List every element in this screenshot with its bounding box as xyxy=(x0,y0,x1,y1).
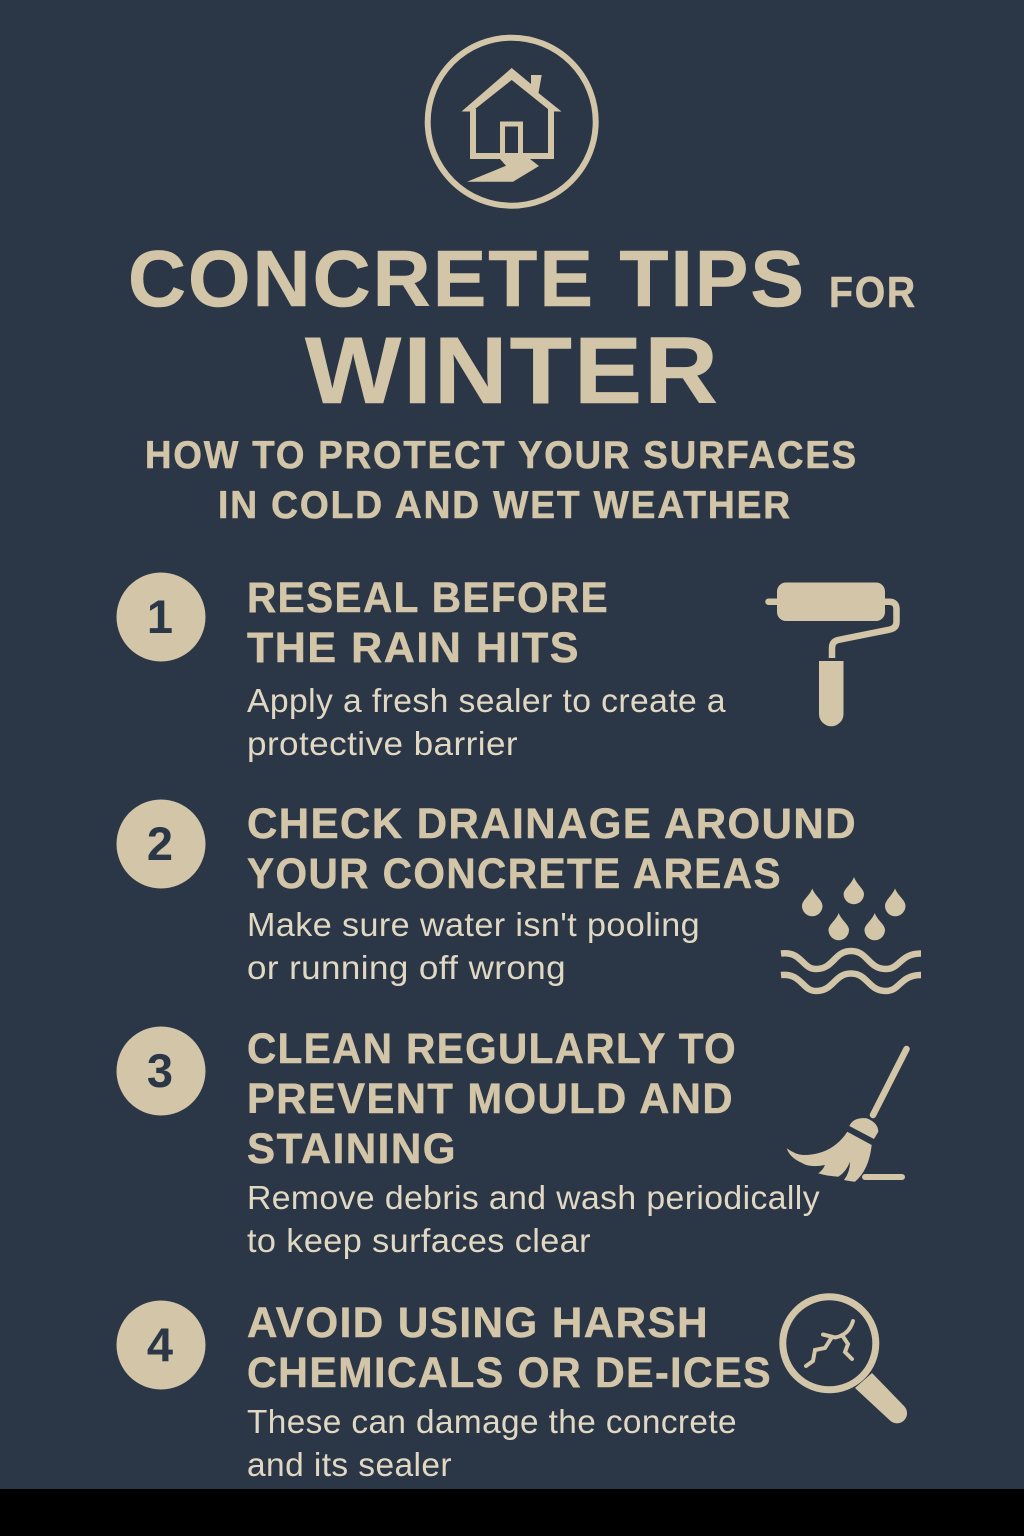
subtitle: HOW TO PROTECT YOUR SURFACES xyxy=(145,434,858,477)
heading: tip 4 xyxy=(247,1299,772,1397)
text: tip 3 description: Remove debris and wash periodically xyxy=(247,1179,820,1216)
heading: tip 2 xyxy=(247,800,857,898)
heading: tip 3: PREVENT MOULD AND xyxy=(247,1075,734,1123)
number badge 4 xyxy=(116,1300,206,1390)
icon: paint roller xyxy=(768,582,896,726)
panel: tip 3 xyxy=(116,1025,906,1259)
number badge 1: 1 xyxy=(147,590,173,643)
number badge 2: 2 xyxy=(147,817,173,870)
number badge 3 xyxy=(116,1026,206,1116)
icon: magnifier over crack xyxy=(783,1297,907,1423)
heading: tip 2: CHECK DRAINAGE AROUND xyxy=(247,800,857,848)
subtitle xyxy=(145,434,858,527)
text: tip 1 description: protective barrier xyxy=(247,725,518,762)
number badge 4: 4 xyxy=(147,1318,173,1371)
title: FOR xyxy=(829,268,917,317)
text: tip 4 description xyxy=(247,1403,737,1483)
heading: tip 4: CHEMICALS OR DE-ICES xyxy=(247,1349,772,1397)
panel: tip 4 xyxy=(116,1297,907,1483)
text: tip 2 description: Make sure water isn't pooling xyxy=(247,906,700,943)
text: tip 3 description: to keep surfaces clear xyxy=(247,1222,591,1259)
heading: tip 1 xyxy=(247,574,609,672)
text: tip 2 description xyxy=(247,906,700,986)
panel: tip 1 xyxy=(116,572,896,762)
heading: tip 3: STAINING xyxy=(247,1125,457,1173)
text: tip 2 description: or running off wrong xyxy=(247,949,566,986)
icon: water drops and waves xyxy=(781,877,921,991)
icon: broom xyxy=(787,1049,906,1182)
text: tip 4 description: and its sealer xyxy=(247,1446,452,1483)
text: tip 1 description: Apply a fresh sealer to create a xyxy=(247,682,726,719)
subtitle: IN COLD AND WET WEATHER xyxy=(218,484,792,527)
heading: tip 4: AVOID USING HARSH xyxy=(247,1299,709,1347)
number badge 1 xyxy=(116,572,206,662)
number badge 3: 3 xyxy=(147,1044,173,1097)
heading: tip 1: RESEAL BEFORE xyxy=(247,574,609,622)
text: tip 4 description: These can damage the concrete xyxy=(247,1403,737,1440)
heading: tip 1: THE RAIN HITS xyxy=(247,624,580,672)
heading: tip 3 xyxy=(247,1025,737,1173)
text: tip 3 description xyxy=(247,1179,820,1259)
icon: house in circle xyxy=(428,38,596,206)
text: tip 1 description xyxy=(247,682,726,762)
title: WINTER xyxy=(305,318,720,424)
title: CONCRETE TIPS xyxy=(128,234,806,323)
bottom black band xyxy=(0,1489,1024,1536)
title xyxy=(128,234,917,424)
heading: tip 2: YOUR CONCRETE AREAS xyxy=(247,850,782,898)
panel: tip 2 xyxy=(116,800,921,991)
heading: tip 3: CLEAN REGULARLY TO xyxy=(247,1025,737,1073)
number badge 2 xyxy=(116,800,206,888)
